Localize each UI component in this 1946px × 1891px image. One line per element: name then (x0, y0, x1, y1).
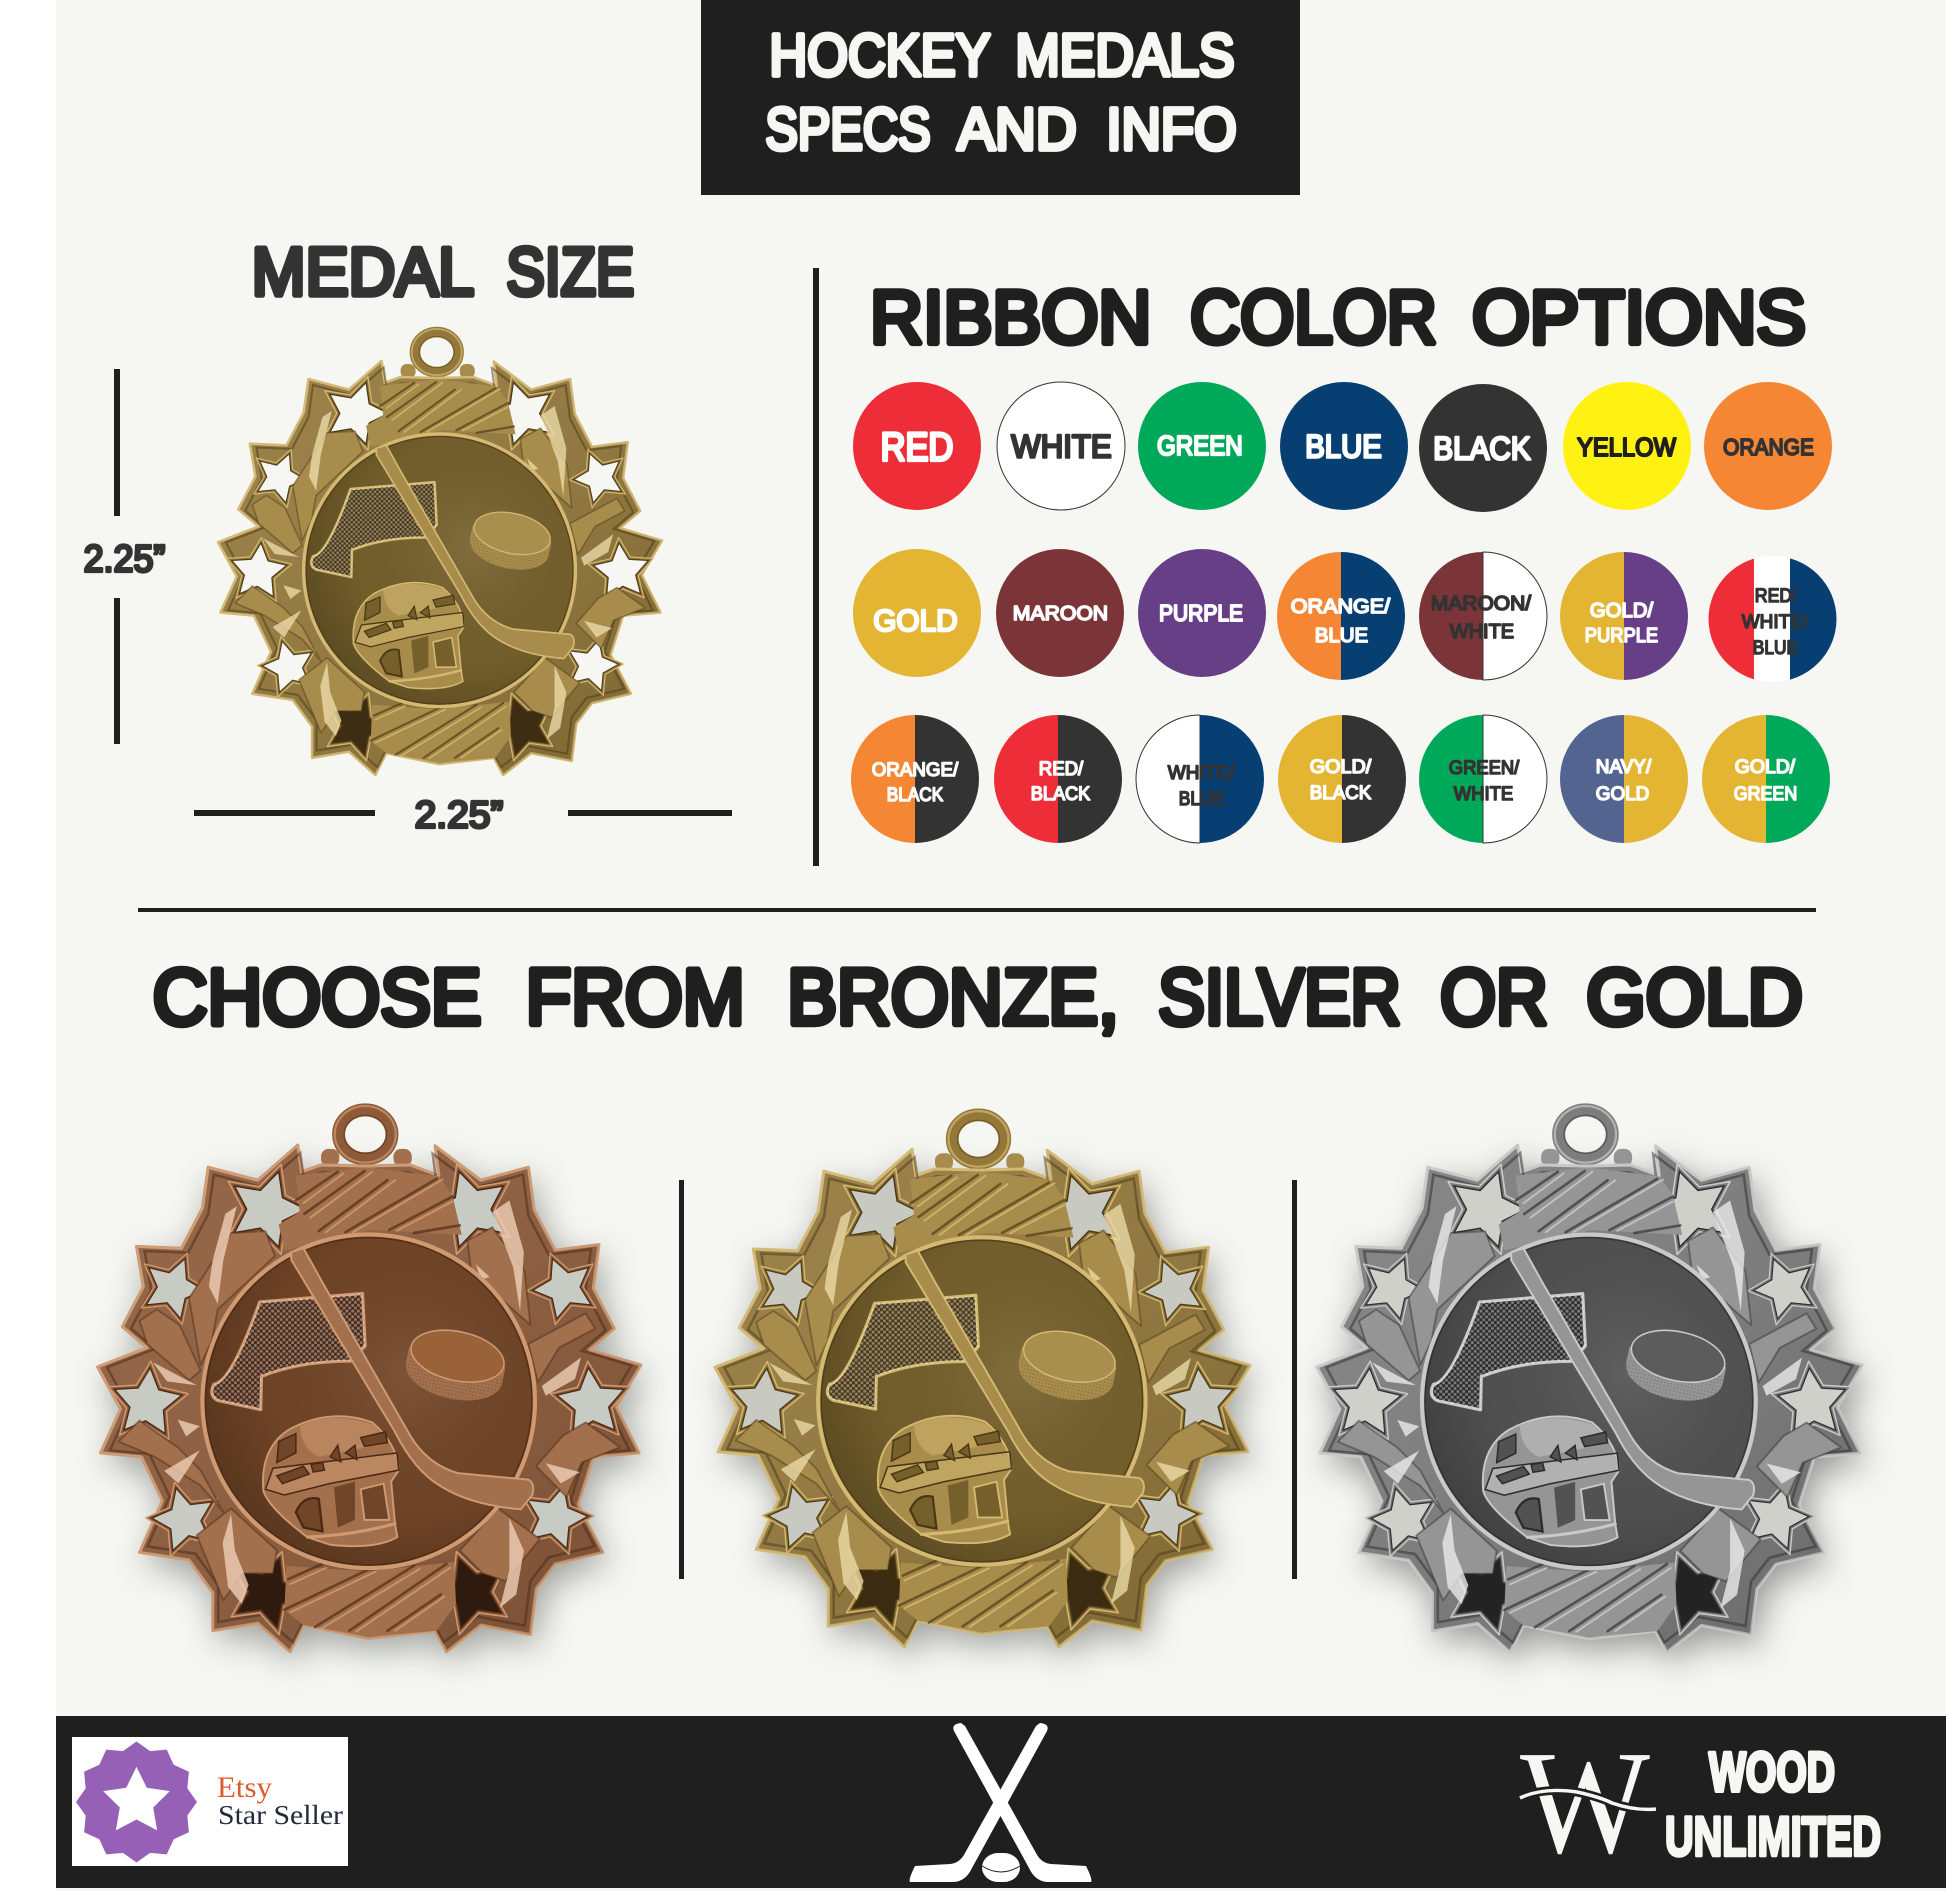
title banner: MEDALS (1015, 23, 1235, 89)
swatch: red white and blue (1708, 555, 1837, 683)
swatch: white and blue: WHITE/ (1168, 763, 1235, 784)
title banner: INFO (1106, 97, 1237, 163)
heading: choose from bronze, silver or gold: CHOOSE (153, 952, 481, 1041)
swatch: red and black: BLACK (1031, 784, 1090, 805)
swatch: orange (1704, 382, 1832, 510)
heading: ribbon color options: COLOR (1190, 275, 1437, 359)
heading: choose from bronze, silver or gold: SILVER (1158, 952, 1401, 1041)
swatch: gold and purple (1560, 552, 1688, 680)
medal divider (679, 1180, 684, 1579)
swatch: gold and black: BLACK (1310, 783, 1371, 804)
swatch: gold (853, 549, 981, 677)
swatch: navy and gold: NAVY/ (1596, 757, 1652, 778)
swatch: white (997, 382, 1125, 510)
height dimension (84, 369, 165, 744)
logo: wood unlimited: WOOD (1709, 1740, 1835, 1803)
heading: choose from bronze, silver or gold: GOLD (1586, 952, 1803, 1041)
swatch: red and black (994, 715, 1122, 843)
heading: choose from bronze, silver or gold: FROM (526, 952, 745, 1041)
swatch: orange and blue: ORANGE/ (1291, 595, 1390, 618)
swatch: green and white: WHITE (1454, 784, 1513, 805)
swatch: maroon and white: WHITE (1450, 620, 1514, 643)
swatch: maroon and white: MAROON/ (1431, 592, 1531, 615)
heading: medal size: MEDAL (252, 234, 474, 310)
title banner: AND (957, 97, 1077, 163)
height dimension: 2.25” (84, 538, 165, 580)
title banner: SPECS (765, 97, 931, 163)
swatch: red (853, 382, 981, 510)
swatch: white: WHITE (1011, 429, 1112, 465)
swatch: red white and blue: BLUE (1753, 637, 1798, 659)
swatch: maroon (996, 549, 1124, 677)
medal: bronze (98, 1106, 646, 1663)
logo: wood unlimited (1520, 1721, 1881, 1885)
footer bar (56, 1716, 1946, 1888)
swatch: gold and black (1278, 715, 1406, 843)
badge: etsy star seller: Etsy (217, 1771, 272, 1804)
medal: silver (1317, 1106, 1867, 1664)
swatch: gold and purple: GOLD/ (1590, 599, 1653, 622)
badge: etsy star seller (72, 1737, 348, 1866)
swatch: orange: ORANGE (1723, 434, 1814, 460)
heading: ribbon color options: RIBBON (870, 275, 1151, 359)
swatch: orange and black: ORANGE/ (872, 760, 959, 781)
badge: etsy star seller: Star Seller (218, 1800, 343, 1830)
swatch: blue: BLUE (1305, 429, 1382, 465)
swatch: gold: GOLD (873, 603, 958, 638)
swatch: red and black: RED/ (1039, 759, 1084, 780)
swatch: red: RED (881, 425, 953, 469)
medal: size sample gold (218, 329, 662, 775)
heading: medal size (252, 234, 634, 310)
width dimension (194, 794, 732, 836)
swatch: gold and green: GOLD/ (1735, 757, 1796, 778)
swatch: white and blue: BLUE (1179, 789, 1224, 810)
swatch: purple (1138, 549, 1266, 677)
swatch: orange and black (851, 715, 979, 843)
medal divider (1292, 1180, 1297, 1579)
horizontal divider (138, 908, 1816, 912)
swatch: green and white: GREEN/ (1449, 758, 1520, 779)
swatch: orange and black: BLACK (887, 785, 943, 806)
swatch: navy and gold: GOLD (1596, 784, 1649, 805)
icon: purple star badge (76, 1742, 197, 1862)
heading: choose from bronze, silver or gold: BRONZE, (787, 952, 1119, 1041)
swatch: green and white (1419, 715, 1547, 843)
swatch: purple: PURPLE (1159, 600, 1243, 626)
swatch: yellow: YELLOW (1577, 434, 1677, 462)
swatch: green (1138, 382, 1266, 510)
width dimension: 2.25” (415, 794, 503, 836)
swatch: red white and blue: RED/ (1755, 585, 1798, 607)
heading: choose from bronze, silver or gold (153, 952, 1803, 1041)
swatch: black (1419, 384, 1547, 512)
heading: medal size: SIZE (506, 234, 634, 310)
title banner (701, 0, 1300, 195)
panel: medal size (84, 234, 732, 836)
icon: crossed hockey sticks and puck (910, 1723, 1091, 1882)
swatch: navy and gold (1560, 715, 1688, 843)
swatch: orange and blue: BLUE (1315, 624, 1368, 647)
heading: ribbon color options: OPTIONS (1472, 275, 1806, 359)
title banner: HOCKEY (769, 23, 991, 89)
medal: gold (715, 1111, 1255, 1658)
vertical divider (813, 268, 819, 866)
swatch: gold and black: GOLD/ (1310, 757, 1372, 778)
panel: ribbon color options (851, 275, 1837, 843)
swatch: maroon: MAROON (1013, 602, 1108, 625)
swatch: gold and green (1702, 715, 1830, 843)
swatch: black: BLACK (1433, 431, 1531, 467)
swatch: maroon and white (1419, 552, 1547, 680)
heading: ribbon color options (870, 275, 1806, 359)
heading: choose from bronze, silver or gold: OR (1440, 952, 1548, 1041)
swatch: green: GREEN (1157, 430, 1243, 461)
swatch: blue (1280, 382, 1408, 510)
swatch: yellow (1563, 382, 1691, 510)
swatch: red white and blue: WHITE/ (1742, 611, 1809, 633)
swatch: orange and blue (1277, 552, 1405, 680)
swatch: gold and purple: PURPLE (1585, 624, 1658, 647)
swatch: gold and green: GREEN (1734, 784, 1797, 805)
swatch: white and blue (1136, 715, 1264, 843)
logo: wood unlimited: W (1520, 1721, 1650, 1885)
